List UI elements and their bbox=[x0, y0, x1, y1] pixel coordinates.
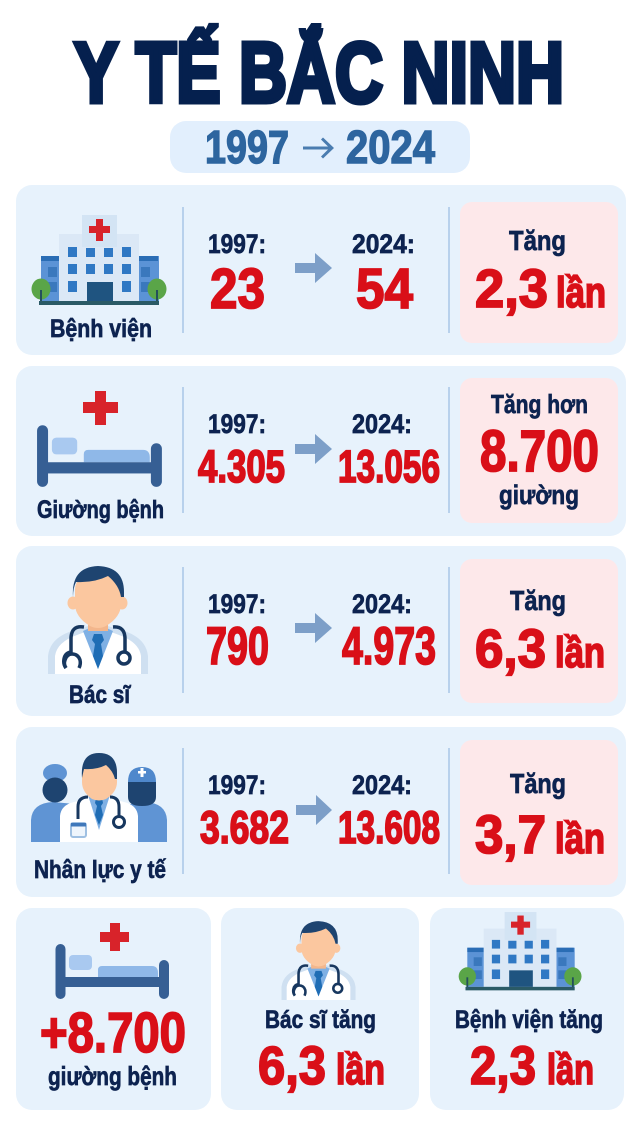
panel: hospitals bbox=[16, 185, 626, 355]
panel: doctors bbox=[16, 546, 626, 716]
panel: summary doctors bbox=[221, 908, 419, 1110]
callout: growth bbox=[460, 740, 618, 885]
1997 value: 23 bbox=[210, 257, 265, 321]
2024 value: 2024: bbox=[352, 409, 412, 439]
icon: medical team bbox=[31, 753, 167, 842]
2024 value bbox=[352, 229, 415, 321]
label: doctors increase: Bác sĩ tăng bbox=[265, 1006, 376, 1034]
label: hospital beds: giường bệnh bbox=[48, 1061, 177, 1091]
callout: growth: 6,3 bbox=[475, 619, 546, 679]
panel: summary beds bbox=[16, 908, 211, 1110]
callout: growth: Tăng hơn bbox=[491, 389, 588, 419]
callout: growth: 3,7 bbox=[475, 805, 546, 865]
figure: doctors growth bbox=[258, 1036, 385, 1096]
1997 value: 790 bbox=[206, 617, 269, 676]
panel: hospital beds bbox=[16, 366, 626, 536]
callout: growth: lần bbox=[556, 269, 606, 317]
year range pill bbox=[170, 121, 470, 173]
2024 value bbox=[342, 589, 436, 676]
1997 value: 1997: bbox=[208, 229, 266, 259]
callout: growth: Tăng bbox=[509, 225, 566, 256]
figure: extra beds: +8.700 bbox=[40, 1001, 186, 1065]
arrow bbox=[295, 434, 332, 464]
figure: hospitals growth: 2,3 bbox=[470, 1036, 536, 1096]
label: hospitals increase: Bệnh viện tăng bbox=[455, 1006, 603, 1034]
label: beds: Giường bệnh bbox=[37, 496, 164, 524]
figure: hospitals growth bbox=[470, 1036, 594, 1096]
icon: hospital bbox=[32, 215, 166, 305]
year range pill: 2024 bbox=[346, 121, 435, 173]
figure: hospitals growth: lần bbox=[547, 1046, 594, 1094]
callout: growth: 8.700 bbox=[480, 419, 599, 484]
callout: growth bbox=[460, 202, 618, 343]
icon: doctor bbox=[48, 566, 148, 674]
callout: growth: Tăng bbox=[510, 585, 566, 616]
panel: medical staff bbox=[16, 727, 626, 897]
1997 value bbox=[198, 409, 285, 492]
callout: growth: 2,3 bbox=[475, 259, 548, 319]
1997 value bbox=[208, 229, 266, 321]
2024 value: 13.056 bbox=[338, 441, 440, 492]
icon: bed with cross bbox=[56, 923, 169, 999]
callout: growth: giường bbox=[499, 480, 579, 510]
arrow bbox=[295, 253, 332, 283]
2024 value bbox=[338, 770, 440, 853]
2024 value: 4.973 bbox=[342, 617, 436, 676]
2024 value: 2024: bbox=[352, 770, 412, 800]
icon: bed bbox=[37, 391, 162, 487]
callout: growth: lần bbox=[555, 815, 605, 863]
icon: hospital bbox=[459, 912, 582, 990]
callout: growth: lần bbox=[555, 629, 605, 677]
1997 value: 1997: bbox=[208, 770, 266, 800]
2024 value: 13.608 bbox=[338, 802, 440, 853]
panel: summary hospitals bbox=[430, 908, 624, 1110]
arrow bbox=[296, 795, 332, 825]
2024 value bbox=[338, 409, 440, 492]
label: doctors: Bác sĩ bbox=[69, 681, 132, 709]
label: hospitals: Bệnh viện bbox=[50, 315, 152, 343]
year range pill: 1997 bbox=[205, 121, 289, 173]
2024 value: 2024: bbox=[352, 589, 412, 619]
1997 value: 4.305 bbox=[198, 441, 285, 492]
figure: doctors growth: lần bbox=[336, 1046, 385, 1094]
1997 value bbox=[200, 770, 289, 853]
callout: growth bbox=[460, 378, 618, 523]
icon: doctor bbox=[282, 921, 356, 1000]
2024 value: 2024: bbox=[352, 229, 415, 259]
1997 value: 3.682 bbox=[200, 802, 289, 853]
2024 value: 54 bbox=[356, 257, 413, 321]
1997 value: 1997: bbox=[208, 409, 266, 439]
arrow bbox=[295, 613, 332, 643]
callout: growth bbox=[460, 559, 618, 703]
callout: growth: Tăng bbox=[510, 768, 566, 799]
label: medical staff: Nhân lực y tế bbox=[34, 856, 166, 884]
1997 value: 1997: bbox=[208, 589, 266, 619]
figure: doctors growth: 6,3 bbox=[258, 1036, 326, 1096]
1997 value bbox=[206, 589, 269, 676]
